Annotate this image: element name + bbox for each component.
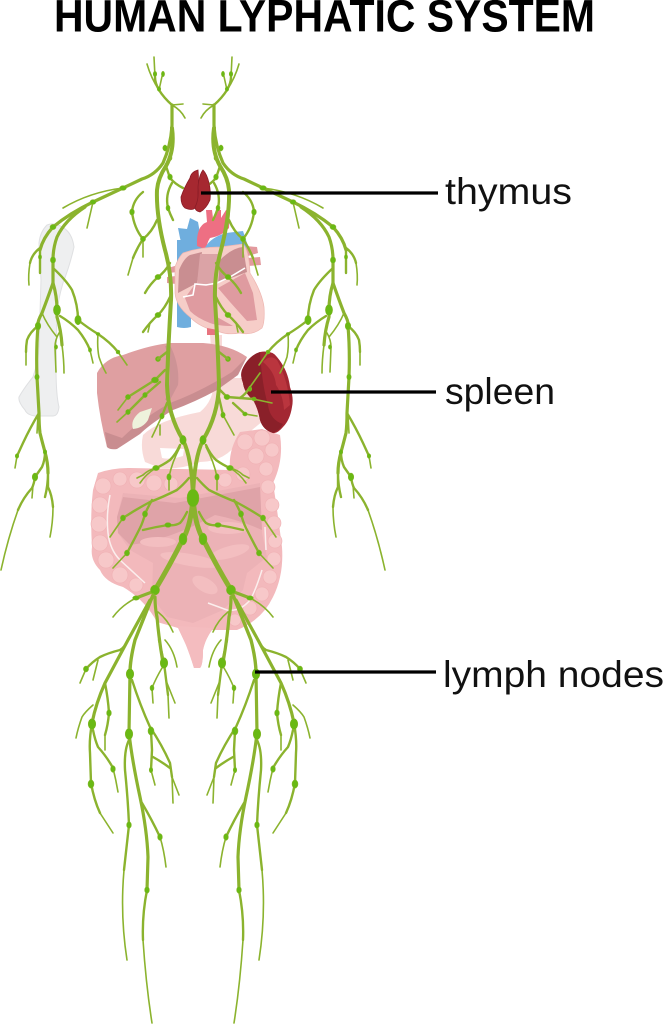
aortic arch: [197, 210, 230, 250]
liver: [97, 343, 247, 449]
pulmonary artery: [203, 231, 250, 266]
liver dark lower band: [105, 357, 247, 449]
rectum: [178, 626, 212, 668]
neck vessels: [123, 57, 185, 188]
central outflow: [197, 254, 218, 284]
heart outer wall: [175, 244, 264, 334]
lymphatic vessels: [1, 57, 385, 1023]
gallbladder: [132, 408, 152, 429]
arm bone: [19, 224, 74, 416]
small intestine dark band: [117, 487, 262, 545]
intestine folds: [140, 522, 251, 598]
arm vessels: [1, 186, 127, 570]
small intestine: [117, 483, 267, 623]
vena cava branches: [178, 218, 203, 252]
right atrium: [178, 252, 202, 293]
liver branches: [117, 370, 167, 437]
central abdominal node: [187, 489, 199, 507]
spleen dark side: [241, 352, 283, 433]
aorta stub: [207, 328, 218, 335]
leg vessels: [76, 595, 179, 1023]
callout: spleen: spleen: [445, 371, 555, 412]
heart septum line: [183, 268, 245, 297]
upper trunk nodes: [180, 435, 206, 445]
mirrored right half of network: [193, 57, 385, 1023]
liver lobe shade: [165, 345, 178, 400]
superior vena cava: [177, 240, 191, 328]
mesentery lines: [107, 495, 266, 610]
callout: lymph nodes: lymph nodes: [443, 654, 664, 695]
spleen: [241, 352, 293, 433]
spleen body: [241, 352, 293, 433]
stomach and oesophagus: [142, 335, 270, 468]
large intestine: [91, 429, 282, 668]
left half of network: [1, 57, 193, 1023]
pelvic trunk: [113, 498, 193, 667]
callout: thymus: thymus: [445, 171, 572, 212]
chest branches: [128, 183, 173, 362]
left ventricle: [218, 273, 257, 321]
intestines: [91, 429, 282, 668]
pulmonary veins: [167, 246, 261, 284]
abdominal branches: [110, 445, 189, 568]
thymus right lobe: [195, 170, 210, 212]
left atrium: [218, 247, 247, 283]
liver body: [97, 343, 247, 449]
heart: [167, 210, 264, 335]
thymus left lobe: [181, 170, 198, 210]
thymus: [181, 170, 210, 212]
central trunk: [157, 128, 193, 498]
spleen highlight: [263, 357, 290, 410]
spleen branches: [218, 373, 272, 435]
colon haustra: [91, 430, 282, 626]
right ventricle: [185, 284, 233, 326]
duodenum gap: [160, 448, 184, 459]
